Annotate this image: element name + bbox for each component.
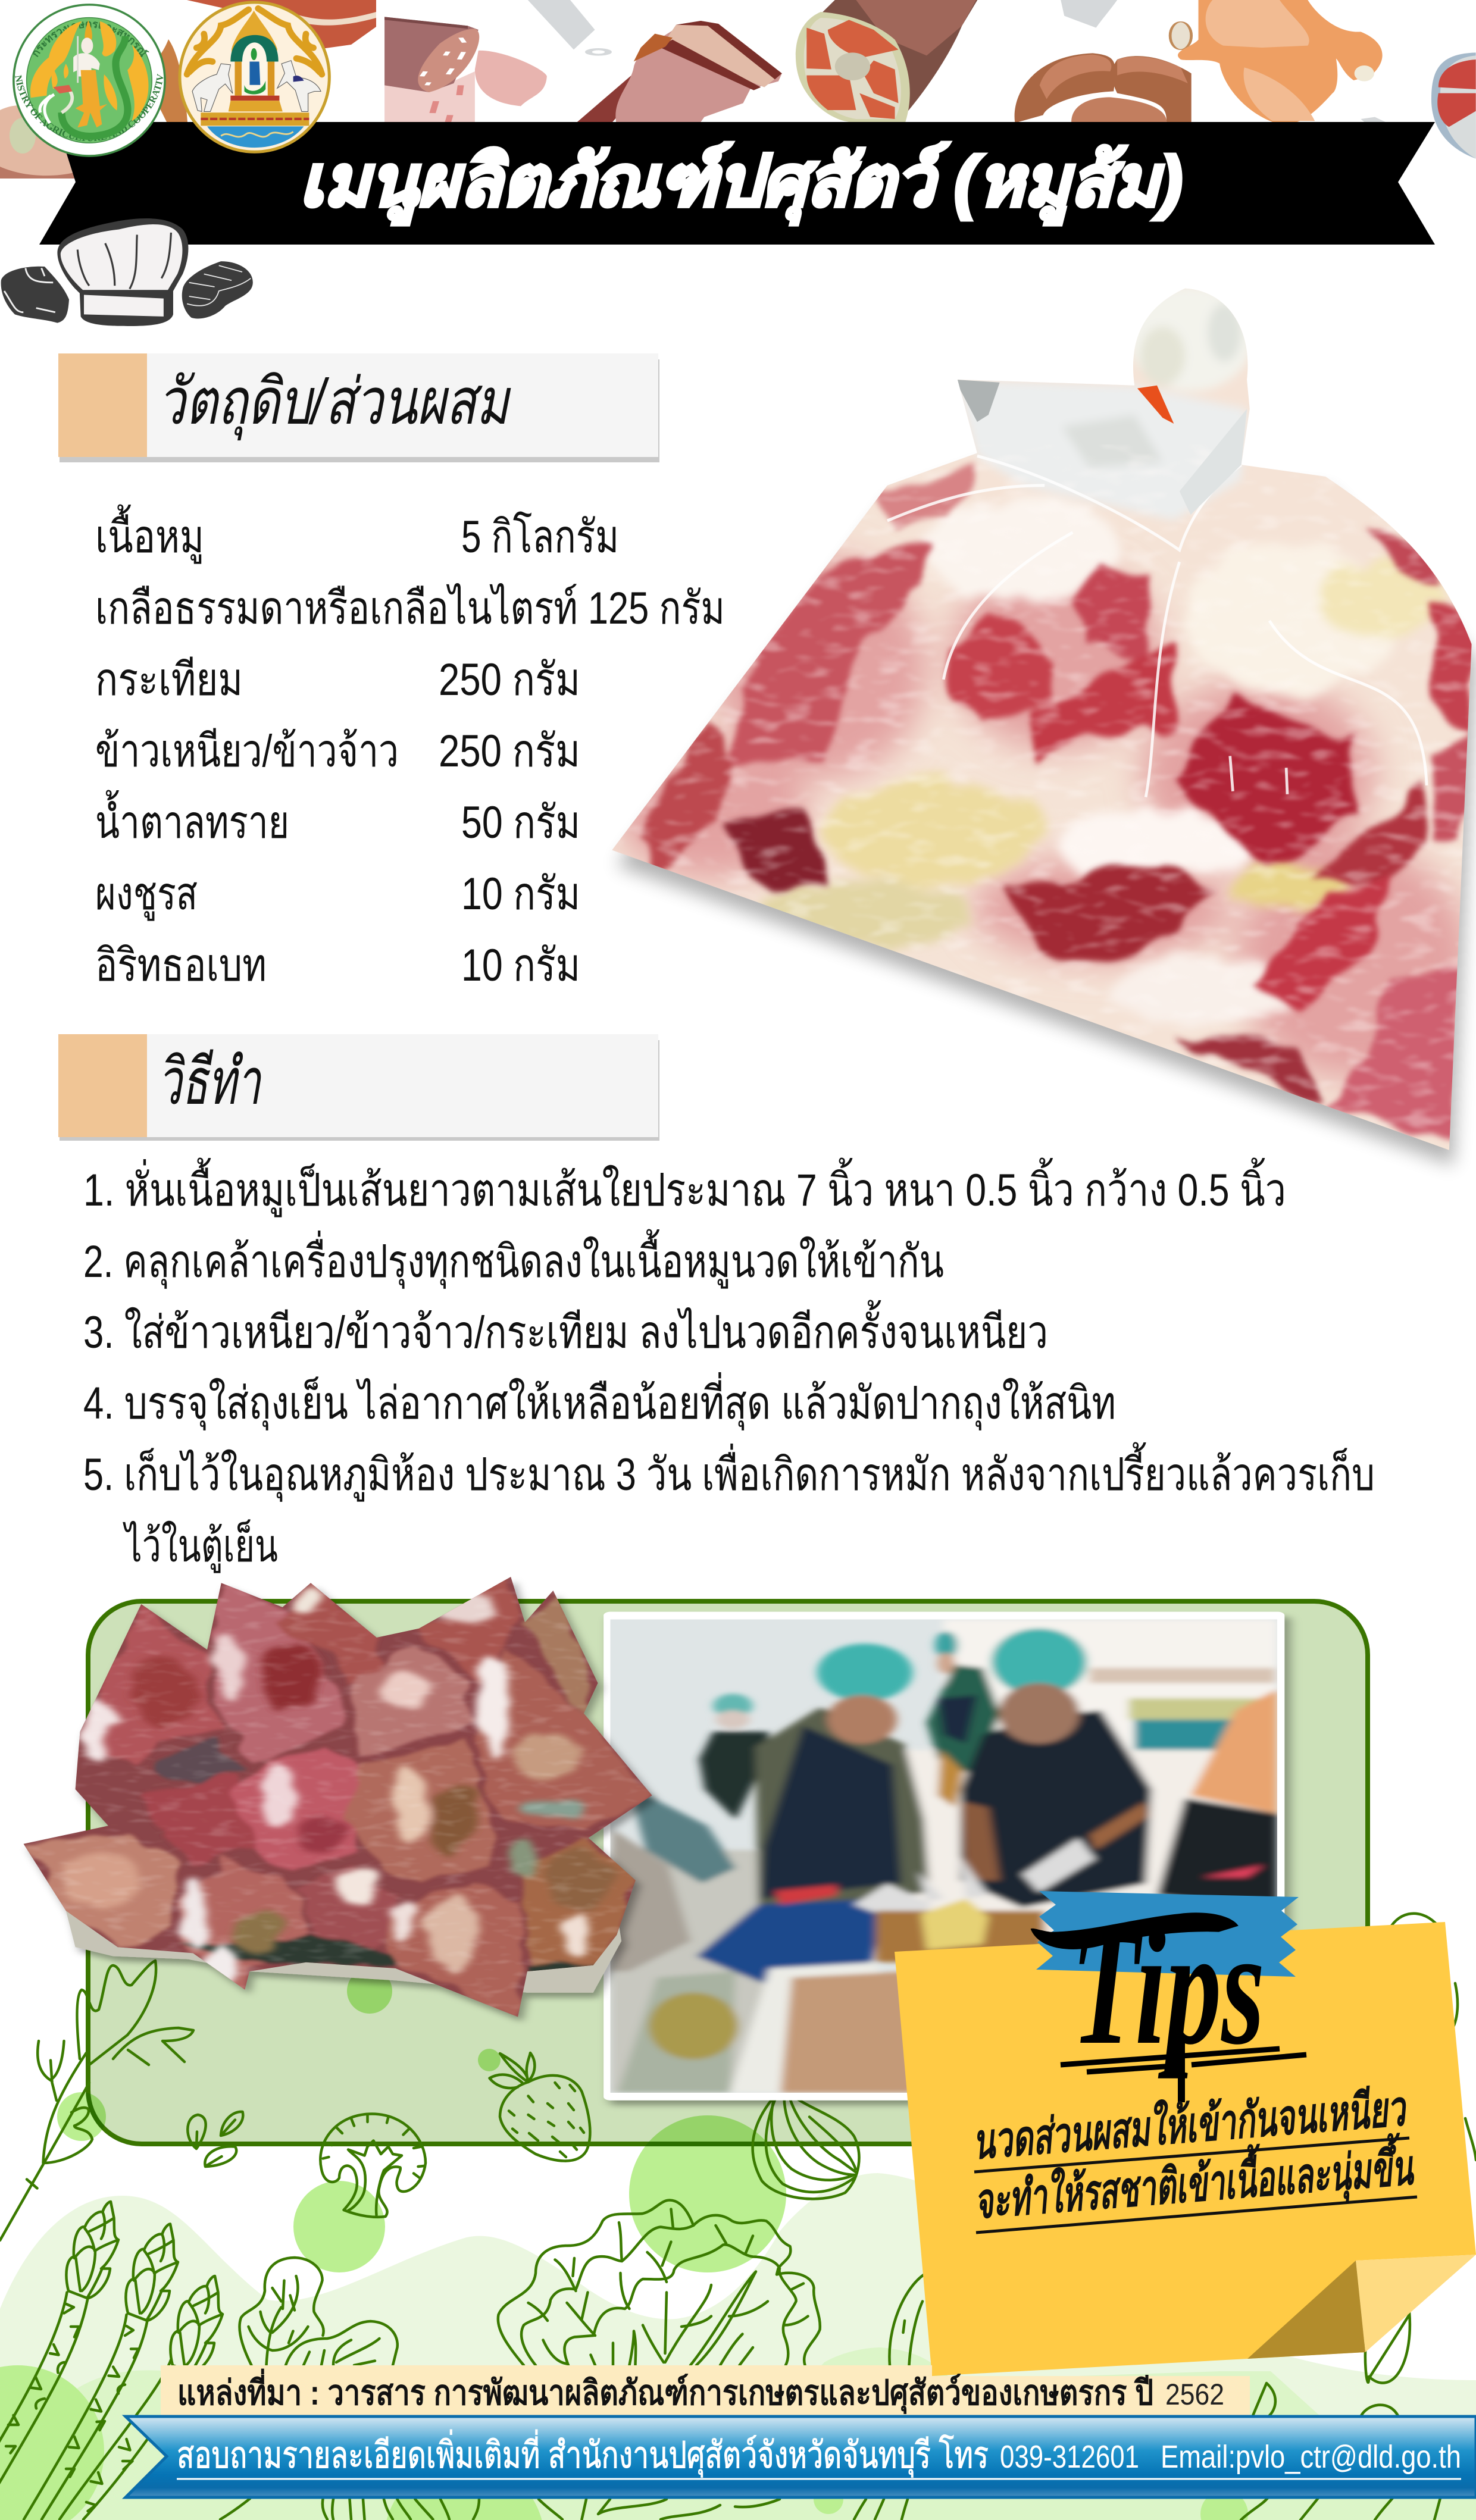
ingredient list: เกลือธรรมดาหรือเกลือไนไตรท์ 125 กรัม [95,583,725,634]
pink haze around the meat [618,556,1472,1079]
ingredient list: น้ำตาลทราย [95,790,289,848]
method steps: 4. บรรจุใส่ถุงเย็น ไล่อากาศให้เหลือน้อยที่สุด แล้วมัดปากถุงให้สนิท [83,1372,1116,1430]
meat: ham cross section [796,0,977,122]
method steps: ไว้ในตู้เย็น [122,1519,278,1573]
contact banner: 039-312601 [1000,2439,1139,2475]
title text: เมนูผลิตภัณฑ์ปศุสัตว์ (หมูส้ม) [299,142,1183,225]
method steps: 3. ใส่ข้าวเหนียว/ข้าวจ้าว/กระเทียม ลงไปนวดอีกครั้งจนเหนียว [83,1300,1048,1358]
source note: 2562 [1165,2378,1224,2411]
pale base tones [758,497,1443,1026]
logo: Department of Livestock Development [180,2,329,152]
right meat [182,261,253,318]
heading: method [58,1034,659,1141]
small leaves [187,2112,243,2167]
source note [161,2365,1250,2417]
meat: bowl and pieces behind logos [0,0,376,179]
naga [40,36,128,136]
contact banner [126,2416,1476,2497]
hat [57,218,188,326]
heading: ingredients [58,353,659,462]
spinach leaves [239,2258,398,2365]
panel: tips sticky note [895,1891,1476,2376]
ingredient list: 250 กรัม [439,655,580,705]
bags [24,1577,652,2017]
gold flames [30,21,148,121]
meat: sausages [1015,53,1192,122]
top meat illustrations strip [0,0,1476,179]
ingredient list [95,504,725,991]
marbling [631,465,1471,1129]
photo: workers preparing pork [603,1612,1284,2100]
title banner [39,122,1435,245]
asparagus [0,2202,223,2519]
ingredient list: เนื้อหมู [95,504,204,564]
faint grey marks [528,0,1386,122]
deity figure [73,20,107,127]
tray [66,1880,621,1993]
contact banner: สอบถามรายละเอียดเพิ่มเติมที่ สำนักงานปศุสัตว์จังหวัดจันทบุรี โทร [177,2430,989,2477]
bag neck [955,286,1252,521]
ingredient list: ผงชูรส [95,869,198,921]
photo: bag of sour pork [595,268,1476,1190]
onion [753,2099,859,2199]
vegetable line art: middle [473,2053,924,2519]
leaf beside the note [889,2274,924,2365]
icon: chef hat with meat [1,218,253,326]
blue tape [1036,1891,1299,1977]
vegetable line art: right side [1241,1914,1476,2520]
shrine [229,11,283,111]
lotus band [201,112,309,126]
method steps: 2. คลุกเคล้าเครื่องปรุงทุกชนิดลงในเนื้อหมูนวดให้เข้ากัน [83,1229,944,1289]
vegetable line art: left side [0,1961,449,2519]
photo: pile of sour pork bags [0,1577,659,2020]
bottom vegetables [220,2499,449,2519]
tips word: Tips [1071,1895,1265,2079]
vine with leaves [0,1961,193,2240]
highlights [64,1586,612,1986]
lettuce [498,2200,820,2365]
plastic sheen [887,456,1427,797]
source note: แหล่งที่มา : วารสาร การพัฒนาผลิตภัณฑ์การเกษตรและปศุสัตว์ของเกษตรกร ปี [177,2368,1153,2415]
ingredient list: 5 กิโลกรัม [461,511,619,562]
heading: ingredients: วัตถุดิบ/ส่วนผสม [158,365,511,441]
tips text [971,2080,1417,2233]
panel: green photo panel [88,1601,1368,2144]
left meat [1,267,69,323]
ingredient list: กระเทียม [95,655,243,705]
scrollwork [187,8,322,74]
meat: right edge piece [1431,52,1476,159]
ingredient list: 10 กรัม [461,940,580,991]
water [207,126,304,148]
ingredient list: 50 กรัม [461,797,580,848]
meat: ham slice [577,21,782,122]
meat: sausage slice [384,17,547,122]
logo: Ministry of Agriculture and Cooperatives: กระทรวงเกษตรและสหกรณ์ [33,21,149,57]
method steps [83,1157,1375,1573]
ingredient list: ข้าวเหนียว/ข้าวจ้าว [95,726,399,777]
fold [1356,2255,1476,2352]
broccoli [320,2114,426,2217]
cow and horse [192,61,321,111]
bottom vegetables [473,2499,908,2519]
ingredient list: 10 กรัม [461,869,580,919]
heading: method: วิธีทำ [158,1045,262,1117]
ingredient list: อิริทธอเบท [95,940,267,991]
strawberry [489,2053,590,2161]
background: green hills and circles [0,1968,1476,2520]
ingredient list: 250 กรัม [439,726,580,777]
red meat areas [629,462,1476,1150]
meat: chicken [1170,0,1383,122]
